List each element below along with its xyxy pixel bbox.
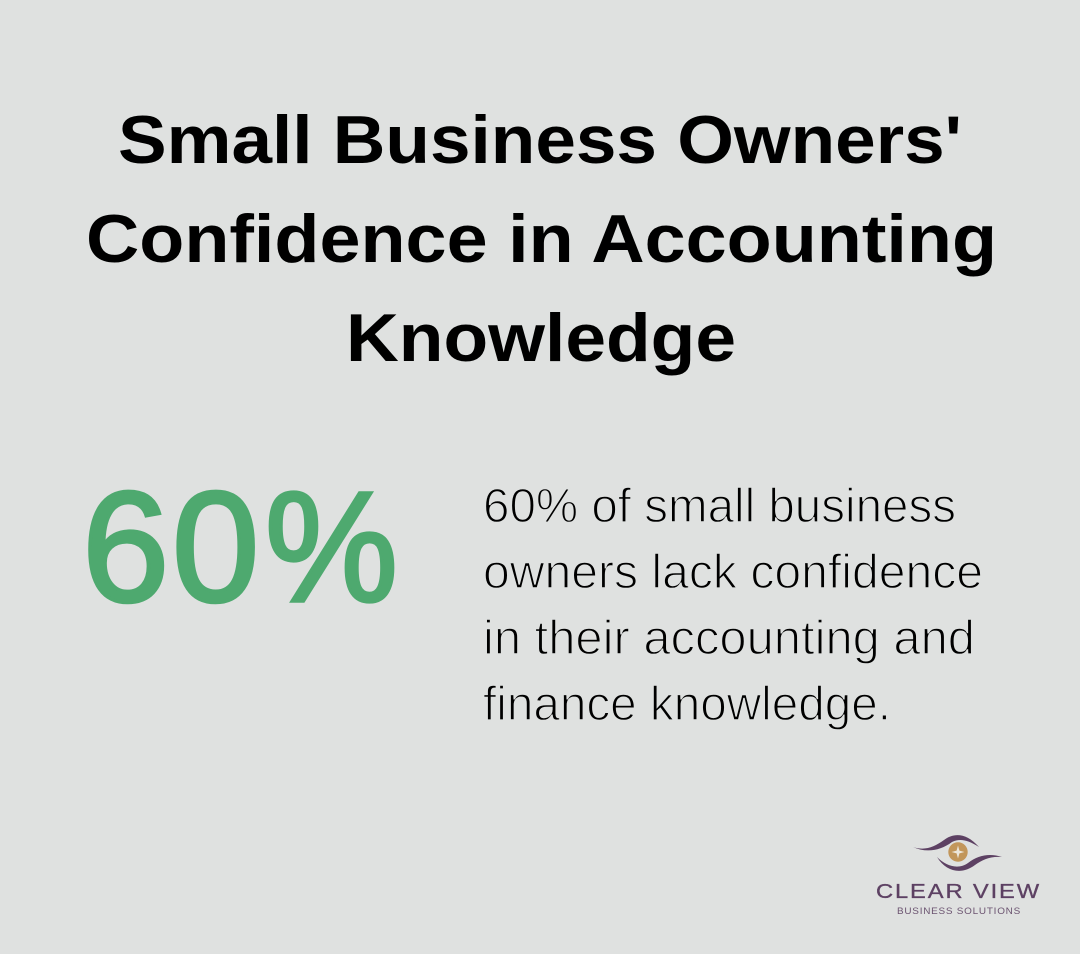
logo: Clear View Business Solutions	[876, 835, 1041, 916]
description text: in their accounting and	[483, 612, 975, 665]
description text: 60% of small business	[483, 480, 956, 533]
logo tagline: BUSINESS SOLUTIONS	[897, 906, 1021, 916]
title: Confidence in Accounting	[86, 201, 997, 277]
big statistic: 60%: 0	[172, 460, 259, 635]
description text	[483, 480, 983, 731]
logo wordmark: CLEAR VIEW	[876, 880, 1041, 903]
big statistic: 60%	[82, 460, 398, 635]
big statistic: 60%: 6	[82, 460, 169, 635]
icon: eye with star	[913, 835, 1002, 871]
title: Knowledge	[346, 300, 736, 376]
description text: finance knowledge.	[483, 678, 891, 731]
title	[86, 102, 997, 376]
title: Small Business Owners'	[118, 102, 962, 178]
big statistic: 60%: %	[265, 460, 398, 635]
description text: owners lack confidence	[483, 546, 983, 599]
